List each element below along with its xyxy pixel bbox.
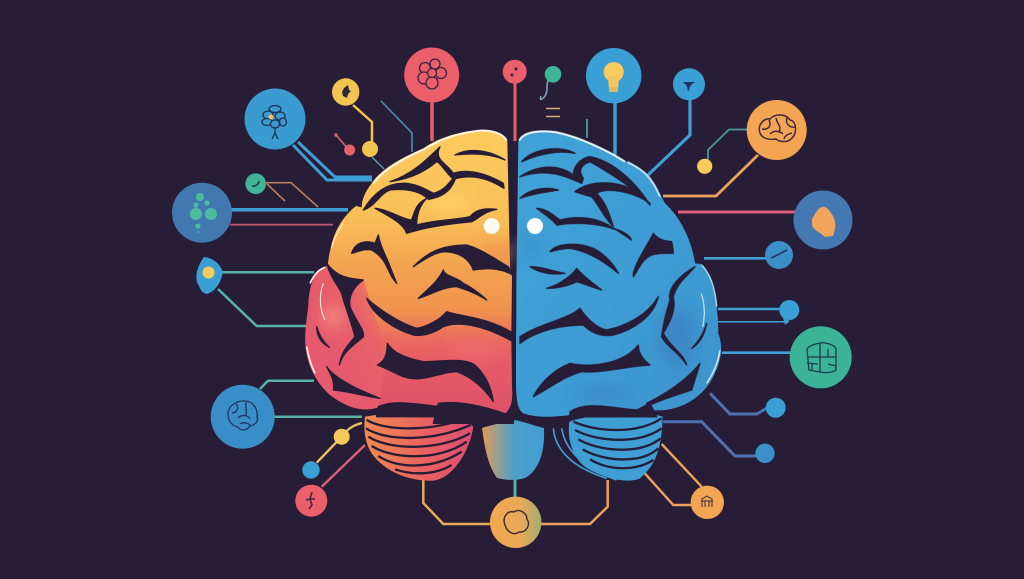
connector: left blue (230, 208, 348, 211)
right cerebellum (553, 413, 663, 481)
left highlights (307, 131, 507, 373)
connector: top red (430, 100, 434, 141)
connector: short tan dashes (546, 108, 560, 116)
connector: lower left teal (260, 381, 362, 417)
connector: lightbulb line (613, 100, 617, 155)
connector: left teal lower (218, 289, 309, 326)
icon: green chip brain (790, 326, 852, 388)
icon: orange brain (747, 100, 807, 160)
connector: teal to yellow node (708, 130, 748, 160)
connector: yellow-blue chain (317, 423, 362, 463)
icon: small green (245, 173, 266, 194)
connector: right pair thin (718, 321, 785, 323)
brain (305, 130, 721, 481)
right highlights (519, 131, 720, 383)
icon nodes (172, 48, 852, 548)
icon: red cell cluster (404, 48, 459, 102)
connector: red small node (336, 135, 349, 150)
icon: small blue right (765, 241, 793, 269)
connector: lower right blue (663, 422, 756, 456)
connector: right pair (718, 308, 781, 310)
icon: orange house (691, 486, 724, 519)
connector: thin blue (381, 101, 412, 152)
left soft shading (323, 196, 510, 357)
icon: bottom circle with blob (490, 497, 541, 548)
connector: green left thin (266, 183, 318, 207)
connector lines (218, 80, 796, 524)
brain stem (482, 420, 544, 480)
node: blue lower right (755, 444, 775, 463)
icon: yellow puzzle (332, 78, 359, 106)
left hemisphere body (305, 130, 512, 417)
node: yellow dot (362, 141, 378, 157)
connector: red bottom-left (322, 445, 365, 487)
right hemisphere folds (520, 149, 707, 417)
icon: blue brain lower left (211, 385, 275, 449)
left hemisphere (305, 130, 513, 423)
connector: yellow node (353, 105, 372, 148)
icon: red figure (295, 485, 327, 517)
connector: green hook (540, 80, 548, 99)
node: red dot (344, 144, 355, 156)
connector: blue small top right (648, 98, 690, 175)
connector: small orange icon lines (643, 444, 702, 505)
connector: stem teal (514, 478, 516, 498)
node: yellow lower left (334, 429, 350, 445)
temporal lobe red (305, 266, 387, 409)
icon: light bulb (586, 48, 641, 103)
connector: left red thin (230, 224, 333, 226)
connector: bottom orange right (541, 480, 608, 524)
node: yellow right (697, 159, 712, 174)
icon: pie speech with yellow (196, 257, 223, 294)
connector: center red (514, 80, 516, 141)
node: blue right pair (779, 300, 799, 325)
left highlight dot (484, 218, 500, 234)
connector: red right (678, 210, 796, 214)
left hemisphere folds (317, 147, 513, 423)
connector: left teal upper (222, 271, 314, 274)
connector: right blue dot (710, 393, 767, 414)
node: blue lower left (302, 461, 320, 479)
icon: blue with green molecule (172, 183, 232, 243)
right soft shading (520, 237, 695, 402)
node: green top (545, 66, 561, 83)
right hemisphere (516, 131, 721, 417)
connector: bottom orange left (423, 478, 491, 524)
connector: orange brain (663, 155, 758, 196)
icon: hand on blue (794, 190, 852, 250)
connector: thin teal under yellow node (372, 157, 384, 169)
connector: green circle line (722, 351, 791, 354)
node: blue right (766, 398, 786, 418)
right highlight dot (527, 218, 543, 234)
left cerebellum (364, 413, 473, 481)
right hemisphere body (516, 131, 721, 417)
connector: short teal (586, 119, 588, 138)
icon: blue tree (244, 88, 306, 150)
connector: right small blue (704, 257, 766, 260)
connector: top-left blue double (293, 142, 372, 180)
icon: small blue top right (673, 68, 705, 100)
icon: red music (503, 60, 527, 84)
node: tiny red dot (334, 133, 338, 137)
